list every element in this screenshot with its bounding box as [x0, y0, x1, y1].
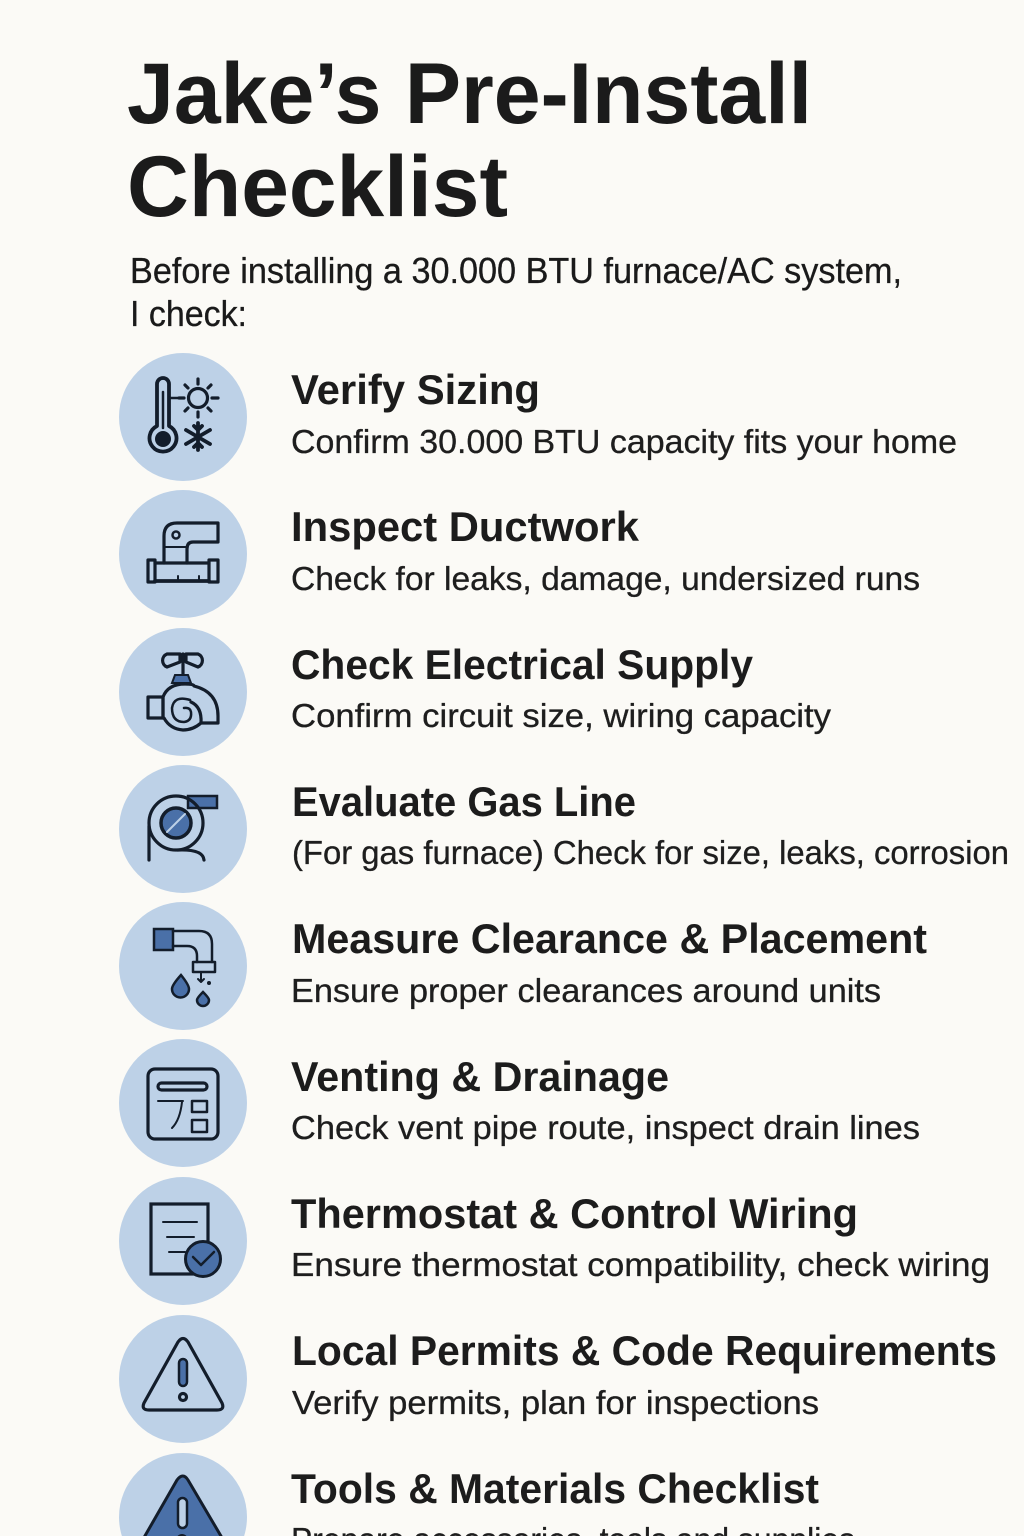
checklist item: inspect ductwork	[119, 490, 920, 618]
heading: Thermostat & Control Wiring	[291, 1190, 858, 1237]
heading: Verify Sizing	[291, 366, 540, 413]
checklist item: thermostat and control wiring	[119, 1177, 990, 1305]
icon: duct pipe	[119, 490, 247, 618]
checklist item: venting and drainage	[119, 1039, 920, 1167]
checklist item: evaluate gas line	[119, 765, 1009, 893]
heading: Measure Clearance & Placement	[292, 915, 927, 962]
icon: filled warning triangle	[119, 1453, 247, 1536]
checklist item: tools and materials checklist	[119, 1453, 855, 1536]
intro text	[130, 250, 902, 334]
icon: gas hose reel	[119, 765, 247, 893]
title: Jake’s Pre-Install	[127, 46, 812, 142]
icon: document with check	[119, 1177, 247, 1305]
heading: Local Permits & Code Requirements	[292, 1327, 997, 1374]
icon: warning triangle	[119, 1315, 247, 1443]
description: Confirm circuit size, wiring capacity	[291, 697, 832, 734]
heading: Tools & Materials Checklist	[291, 1465, 819, 1512]
checklist item: check electrical supply	[119, 628, 832, 756]
checklist item: local permits and code requirements	[119, 1315, 997, 1443]
description: Check vent pipe route, inspect drain lines	[291, 1109, 920, 1146]
icon: faucet with drops	[119, 902, 247, 1030]
icon: valve with spiral	[119, 628, 247, 756]
description: Ensure proper clearances around units	[291, 972, 881, 1009]
title: Checklist	[127, 139, 508, 235]
description: Confirm 30.000 BTU capacity fits your home	[291, 423, 957, 460]
heading: Evaluate Gas Line	[292, 778, 636, 825]
description: Check for leaks, damage, undersized runs	[291, 560, 920, 597]
description: Ensure thermostat compatibility, check wiring	[291, 1246, 990, 1283]
description: (For gas furnace) Check for size, leaks, corrosion	[292, 834, 1009, 871]
heading: Venting & Drainage	[291, 1053, 669, 1100]
title	[127, 46, 812, 235]
heading: Inspect Ductwork	[291, 503, 640, 550]
icon: thermometer with sun and snowflake	[119, 353, 247, 481]
heading: Check Electrical Supply	[291, 641, 754, 688]
intro text: I check:	[130, 293, 247, 334]
checklist item: verify sizing	[119, 353, 957, 481]
description: Verify permits, plan for inspections	[292, 1384, 819, 1421]
checklist item: measure clearance and placement	[119, 902, 927, 1030]
intro text: Before installing a 30.000 BTU furnace/AC system,	[130, 250, 902, 291]
icon: control panel	[119, 1039, 247, 1167]
